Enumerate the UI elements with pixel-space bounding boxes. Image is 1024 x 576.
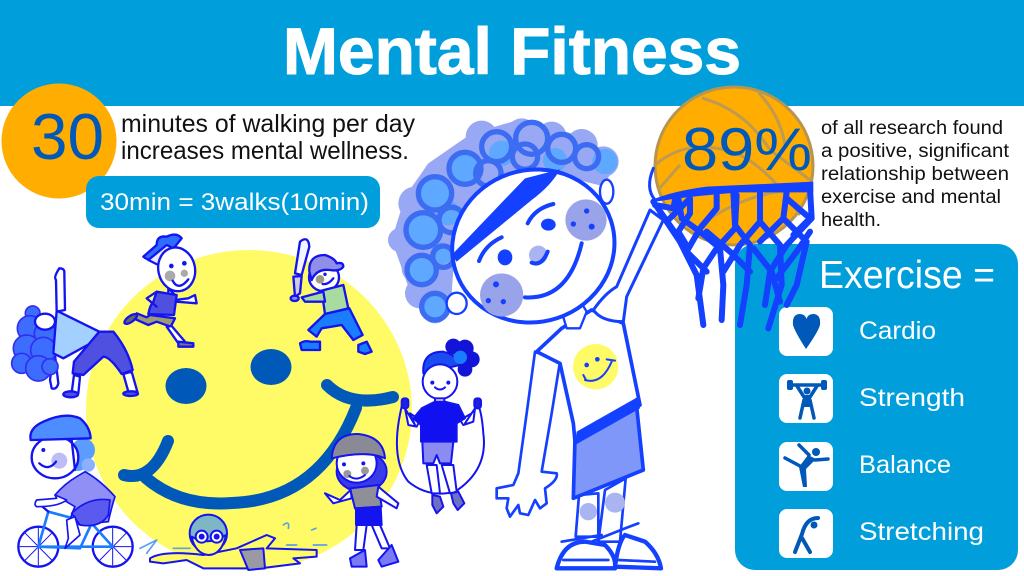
boy back arm [497, 352, 560, 517]
title: Mental Fitness [283, 14, 741, 88]
row: stretching [779, 509, 984, 558]
text: 89% research finding: relationship between [821, 164, 1009, 185]
boy head [432, 148, 634, 344]
row: cardio: Cardio [859, 317, 936, 345]
panel heading: Exercise = [819, 254, 995, 297]
row: cardio [779, 307, 936, 356]
basketball hoop net [650, 168, 813, 328]
boy raised arm [593, 210, 663, 322]
figure: cyclist [18, 416, 133, 567]
panel: exercise list [735, 244, 1018, 570]
row: stretching: Stretching [859, 518, 984, 546]
row: balance: Balance [859, 451, 951, 479]
boy shorts [573, 407, 643, 498]
figure: runner [123, 235, 199, 347]
badge: 30: 30 [31, 100, 104, 173]
boy shirt [537, 310, 640, 445]
basketball [655, 87, 813, 245]
boy legs and shoes [557, 478, 661, 568]
stat: 89%: 89% [682, 116, 812, 183]
callout: 30min pill [86, 176, 380, 228]
text: 89% research finding: a positive, significant [821, 141, 1010, 162]
row: strength [779, 374, 965, 423]
figure: batter [291, 239, 372, 354]
figure: jump rope girl [397, 339, 484, 513]
boy neck [562, 303, 587, 328]
figure: roller skater [325, 434, 398, 567]
text: walking stat [121, 110, 415, 165]
row: balance [779, 442, 951, 491]
yellow smiley background [86, 250, 412, 570]
figure: yoga [12, 268, 138, 397]
text: 89% research finding [821, 118, 1010, 231]
callout: 30min pill: 30min = 3walks(10min) [100, 189, 369, 216]
row: strength: Strength [859, 384, 965, 412]
text: 89% research finding: of all research found [821, 118, 1003, 139]
badge: 30 [2, 84, 116, 198]
header band [0, 0, 1024, 106]
figure: swimmer [140, 515, 327, 570]
text: 89% research finding: health. [821, 210, 881, 231]
boy hair [388, 118, 619, 323]
text: walking stat: minutes of walking per day [121, 110, 415, 138]
text: walking stat: increases mental wellness. [121, 137, 409, 165]
text: 89% research finding: exercise and mental [821, 187, 1001, 208]
figure: big boy with hoop [388, 118, 663, 568]
